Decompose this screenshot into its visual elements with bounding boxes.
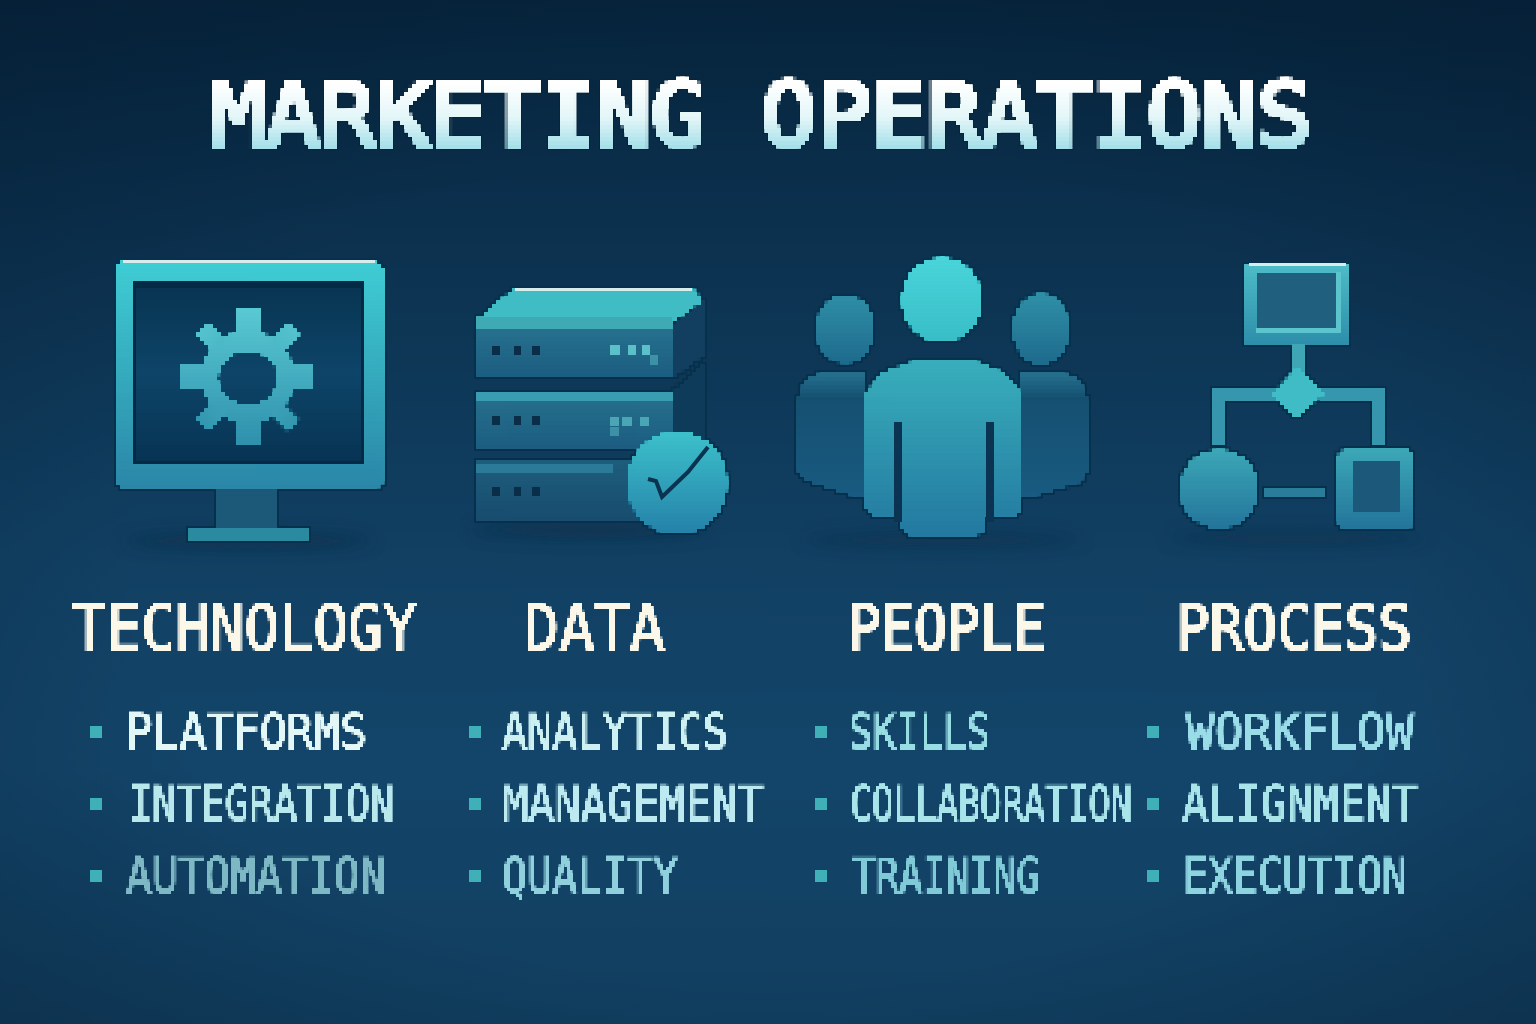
list: people items: COLLABORATION — [850, 776, 1132, 833]
heading: data: DATA — [524, 592, 665, 665]
list: technology items: INTEGRATION — [128, 776, 394, 833]
list: data items: QUALITY — [502, 848, 678, 905]
list: process items: ALIGNMENT — [1182, 776, 1418, 833]
check mark — [648, 447, 708, 497]
icon: process flowchart — [1167, 263, 1427, 545]
list: process items: WORKFLOW — [1186, 704, 1414, 761]
list: data items — [469, 704, 764, 905]
list: technology items: PLATFORMS — [126, 704, 367, 761]
heading: process: PROCESS — [1176, 592, 1412, 665]
list: process items: EXECUTION — [1183, 848, 1407, 905]
list: data items: MANAGEMENT — [502, 776, 764, 833]
list: process items — [1147, 704, 1418, 905]
heading: technology: TECHNOLOGY — [72, 592, 417, 665]
icon: server stack with check badge — [470, 288, 727, 538]
heading: people: PEOPLE — [848, 592, 1046, 665]
list: technology items — [90, 704, 394, 905]
title: MARKETING OPERATIONS — [210, 64, 1312, 167]
list: technology items: AUTOMATION — [126, 848, 386, 905]
icon: monitor with gear — [115, 260, 383, 549]
list: people items: SKILLS — [849, 704, 990, 761]
list: people items: TRAINING — [852, 848, 1040, 905]
icon: people group — [798, 258, 1087, 547]
arm gaps — [894, 422, 994, 522]
server status lights — [492, 345, 658, 496]
list: data items: ANALYTICS — [502, 704, 728, 761]
list: people items — [815, 704, 1132, 905]
